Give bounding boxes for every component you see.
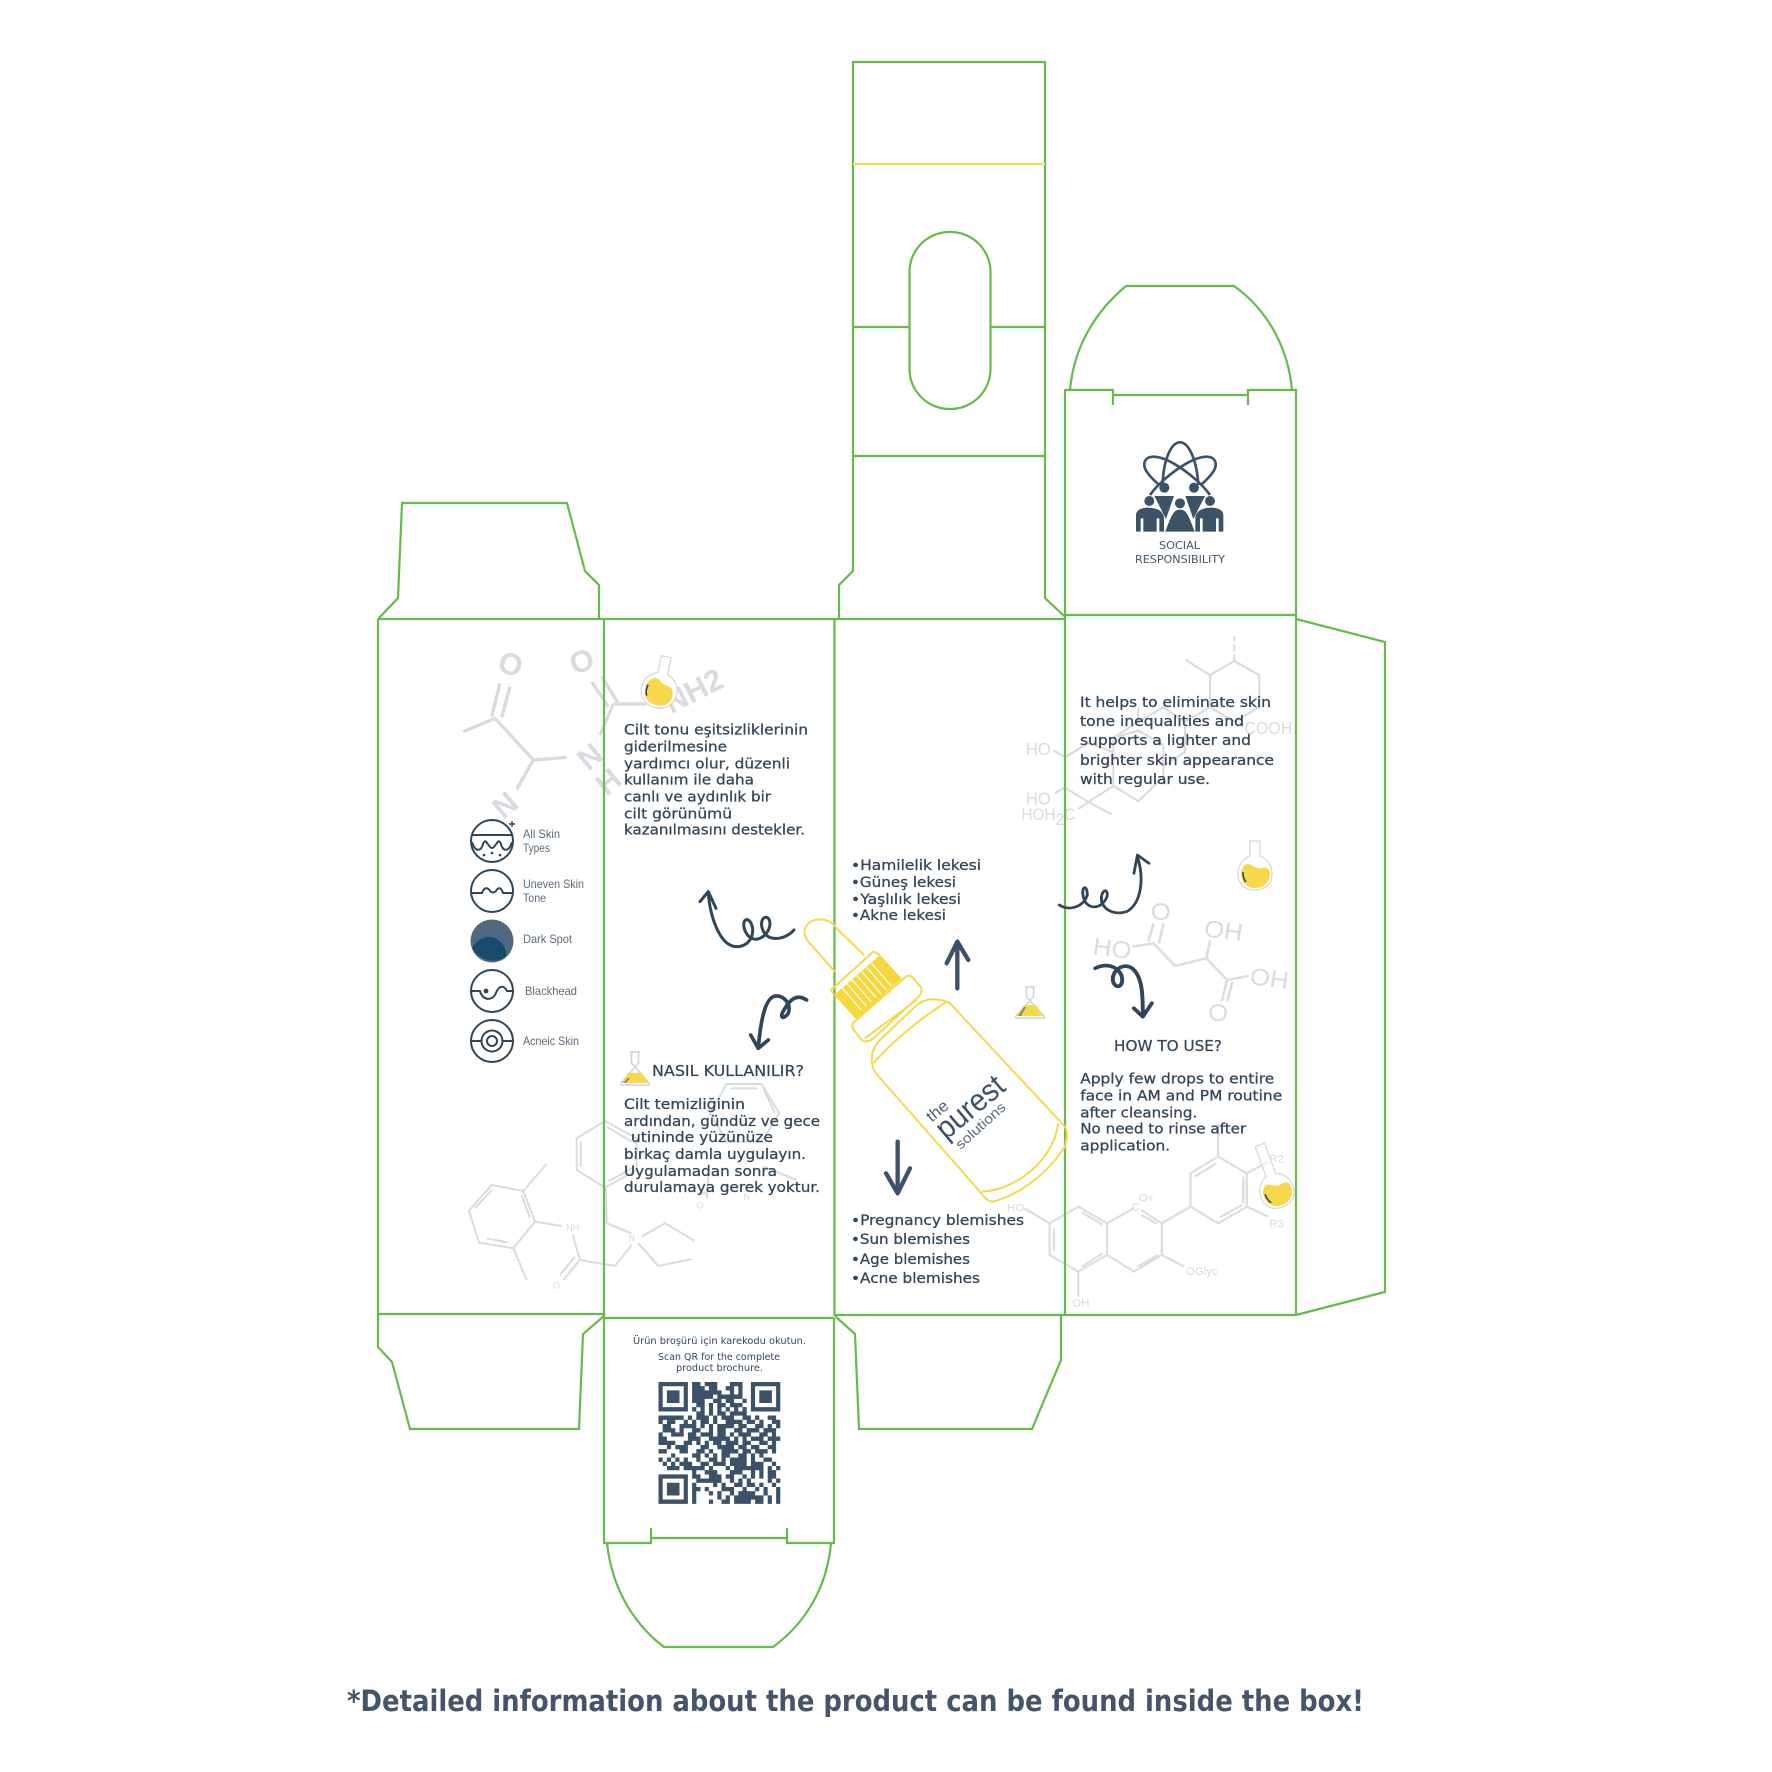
molecule: anthocyanin lower right: R3 — [1269, 1219, 1284, 1230]
icon: uneven skin tone — [471, 870, 513, 912]
people — [1136, 483, 1223, 532]
logo: the purest solutions: the — [923, 1097, 952, 1126]
label: social responsibility: RESPONSIBILITY — [1135, 553, 1225, 566]
body text: Turkish usage — [624, 1096, 820, 1196]
molecule: lidocaine lower left: NH — [566, 1223, 579, 1233]
body text: Turkish benefit: kazanılmasını destekler. — [624, 821, 805, 838]
label: social responsibility — [1135, 539, 1225, 566]
molecule: steroid acid upper right: HO — [1026, 788, 1051, 809]
molecule: anthocyanin lower right: C — [1132, 1202, 1140, 1214]
skin type legend — [470, 820, 584, 1062]
bullet list: English blemishes: •Sun blemishes — [851, 1231, 970, 1248]
rounded tab bottom — [607, 1543, 831, 1647]
icon: all skin types — [471, 820, 515, 862]
logo: the purest solutions: solutions — [952, 1099, 1009, 1152]
arrow: straight down — [886, 1142, 910, 1193]
molecule: steroid acid upper right — [1022, 636, 1292, 829]
body text: Turkish benefit: giderilmesine — [624, 738, 727, 755]
icon: dark spot — [470, 920, 514, 962]
molecule: steroid acid upper right: HO — [1026, 738, 1051, 759]
bullet list: English blemishes — [851, 1212, 1024, 1287]
molecule: left panel amide: N — [486, 785, 525, 826]
molecule: lidocaine lower left: N — [743, 1192, 750, 1202]
flap: bottom middle — [835, 1316, 1061, 1429]
molecule: anthocyanin lower right: R2 — [1269, 1154, 1284, 1165]
body text: English benefit: brighter skin appearance — [1080, 752, 1274, 769]
molecule: malic acid right panel — [1091, 899, 1290, 1027]
footer note: *Detailed information about the product can be found inside the box! — [347, 1684, 1364, 1718]
panel grid — [378, 615, 1296, 1318]
molecule: steroid acid upper right: COOH — [1244, 719, 1292, 738]
body text: Turkish benefit: cilt görünümü — [624, 805, 732, 822]
body text: Turkish usage: Uygulamadan sonra — [624, 1163, 777, 1180]
body text: English usage: No need to rinse after — [1080, 1120, 1246, 1137]
molecule: steroid acid upper right: C — [1064, 806, 1075, 824]
legend labels: Uneven Skin — [523, 877, 584, 891]
legend labels: Tone — [523, 891, 546, 905]
legend labels: Blackhead — [525, 984, 577, 998]
body text: Turkish benefit — [624, 721, 808, 838]
legend labels: Acneic Skin — [523, 1034, 579, 1048]
body text: Turkish usage: Cilt temizliğinin — [624, 1096, 745, 1113]
heading: NASIL KULLANILIR: NASIL KULLANILIR? — [652, 1062, 804, 1080]
collar — [852, 976, 922, 1041]
logo: the purest solutions: purest — [928, 1068, 1012, 1146]
molecule: anthocyanin lower right — [1007, 1123, 1284, 1310]
icon: blackhead — [471, 970, 513, 1012]
rounded tab top right — [1070, 286, 1292, 390]
side glue flap right — [1296, 619, 1385, 1315]
body text: English usage: application. — [1080, 1137, 1170, 1154]
dropper bulb — [805, 919, 864, 972]
body text: Turkish usage: durulamaya gerek yoktur. — [624, 1179, 820, 1196]
bullet list: Turkish blemishes: •Hamilelik lekesi — [851, 857, 981, 874]
tall top flap — [839, 62, 1064, 619]
qr caption — [633, 1334, 806, 1374]
molecule: steroid acid upper right: 2 — [1056, 811, 1064, 829]
molecule: steroid acid upper right: HOH — [1022, 806, 1056, 824]
molecule: anthocyanin lower right: HO — [1007, 1203, 1025, 1215]
legend labels — [523, 827, 584, 1048]
qr caption: Ürün broşürü için karekodu okutun. — [633, 1334, 806, 1347]
body text: Turkish benefit: canlı ve aydınlık bir — [624, 788, 771, 805]
qr caption: product brochure. — [676, 1363, 763, 1374]
body text: English benefit: tone inequalities and — [1080, 713, 1244, 730]
qr code — [658, 1384, 780, 1502]
body text: English usage: Apply few drops to entire — [1080, 1070, 1274, 1087]
icon: acneic skin — [471, 1020, 513, 1062]
molecule: malic acid right panel: HO — [1091, 933, 1133, 965]
bullet list: Turkish blemishes: •Yaşlılık lekesi — [851, 891, 961, 908]
body text: English usage: face in AM and PM routine — [1080, 1087, 1282, 1104]
bullet list: Turkish blemishes: •Güneş lekesi — [851, 874, 956, 891]
molecule: left panel amide: O — [495, 645, 526, 684]
molecule: lidocaine lower left: O — [696, 1200, 703, 1210]
body text: English benefit: supports a lighter and — [1080, 732, 1251, 749]
molecule: left panel amide: NH2 — [659, 662, 729, 720]
molecule: malic acid right panel: OH — [1248, 963, 1290, 995]
flap: bottom left — [378, 1314, 604, 1429]
body text: Turkish usage: ardından, gündüz ve gece — [624, 1113, 820, 1130]
molecule: left panel amide: O — [565, 642, 599, 682]
legend labels: All Skin — [523, 827, 560, 841]
body text: Turkish benefit: yardımcı olur, düzenli — [624, 755, 790, 772]
molecule: left panel amide: N — [571, 737, 610, 777]
body text: English usage — [1080, 1070, 1282, 1154]
body text: Turkish usage: utininde yüzünüze — [631, 1129, 773, 1146]
arrow: curly up from benefit — [1059, 855, 1149, 913]
bullet list: Turkish blemishes — [851, 857, 981, 924]
arrow: straight up — [947, 942, 968, 988]
atom orbits — [1144, 442, 1216, 495]
molecule: malic acid right panel: O — [1151, 899, 1171, 926]
molecule: left panel amide: H — [589, 762, 628, 802]
molecule: anthocyanin lower right: OH — [1072, 1298, 1089, 1310]
body text: Turkish benefit: Cilt tonu eşitsizliklerinin — [624, 721, 808, 738]
icon: flask lower right — [1244, 1139, 1298, 1213]
body text: Turkish benefit: kullanım ile daha — [624, 771, 754, 788]
flap: top left — [378, 503, 599, 619]
icon: social responsibility — [1136, 442, 1223, 532]
icon: flask panel two — [638, 653, 684, 711]
molecule: malic acid right panel: O — [1208, 1000, 1228, 1027]
product bottle — [805, 919, 1067, 1202]
social responsibility panel — [1065, 390, 1296, 615]
legend labels: Types — [523, 841, 550, 855]
tall flap pill slot — [910, 232, 990, 409]
body text: English benefit — [1080, 694, 1274, 788]
bullet list: English blemishes: •Pregnancy blemishes — [851, 1212, 1024, 1229]
tall flap fold line — [853, 163, 1045, 165]
icon: flask upper right — [1238, 841, 1272, 890]
legend labels: Dark Spot — [523, 932, 573, 946]
qr panel outline — [604, 1318, 834, 1543]
heading: HOW TO USE: HOW TO USE? — [1114, 1037, 1222, 1055]
arrow: curly up to benefit — [700, 892, 794, 947]
bullet list: Turkish blemishes: •Akne lekesi — [851, 907, 946, 924]
bullet list: English blemishes: •Age blemishes — [851, 1251, 970, 1268]
qr caption: Scan QR for the complete — [658, 1352, 780, 1363]
icon: conical flask Turkish heading — [621, 1052, 649, 1085]
arrow: curly down to how to use english — [1095, 966, 1152, 1017]
body text: English benefit: with regular use. — [1080, 771, 1210, 788]
molecule: anthocyanin lower right: OGlyc — [1186, 1266, 1218, 1278]
molecule: left panel amide — [463, 642, 729, 826]
label: social responsibility: SOCIAL — [1159, 539, 1201, 552]
molecule: lidocaine lower left: N — [628, 1233, 635, 1243]
body text: English benefit: It helps to eliminate skin — [1080, 694, 1271, 711]
body text: Turkish usage: birkaç damla uygulayın. — [624, 1146, 806, 1163]
bottle body — [872, 999, 1067, 1202]
box dieline — [378, 62, 1385, 1647]
body text: English usage: after cleansing. — [1080, 1104, 1197, 1121]
molecule: anthocyanin lower right: O+ — [1139, 1193, 1154, 1205]
ribbed cap — [831, 952, 902, 1020]
icon: conical flask centre — [1016, 987, 1044, 1018]
molecule: malic acid right panel: OH — [1202, 915, 1245, 947]
molecule: lidocaine lower left — [469, 1084, 797, 1290]
molecule: lidocaine lower left: O — [553, 1280, 560, 1290]
bullet list: English blemishes: •Acne blemishes — [851, 1270, 980, 1287]
arrow: curly down to how to use — [751, 996, 807, 1048]
